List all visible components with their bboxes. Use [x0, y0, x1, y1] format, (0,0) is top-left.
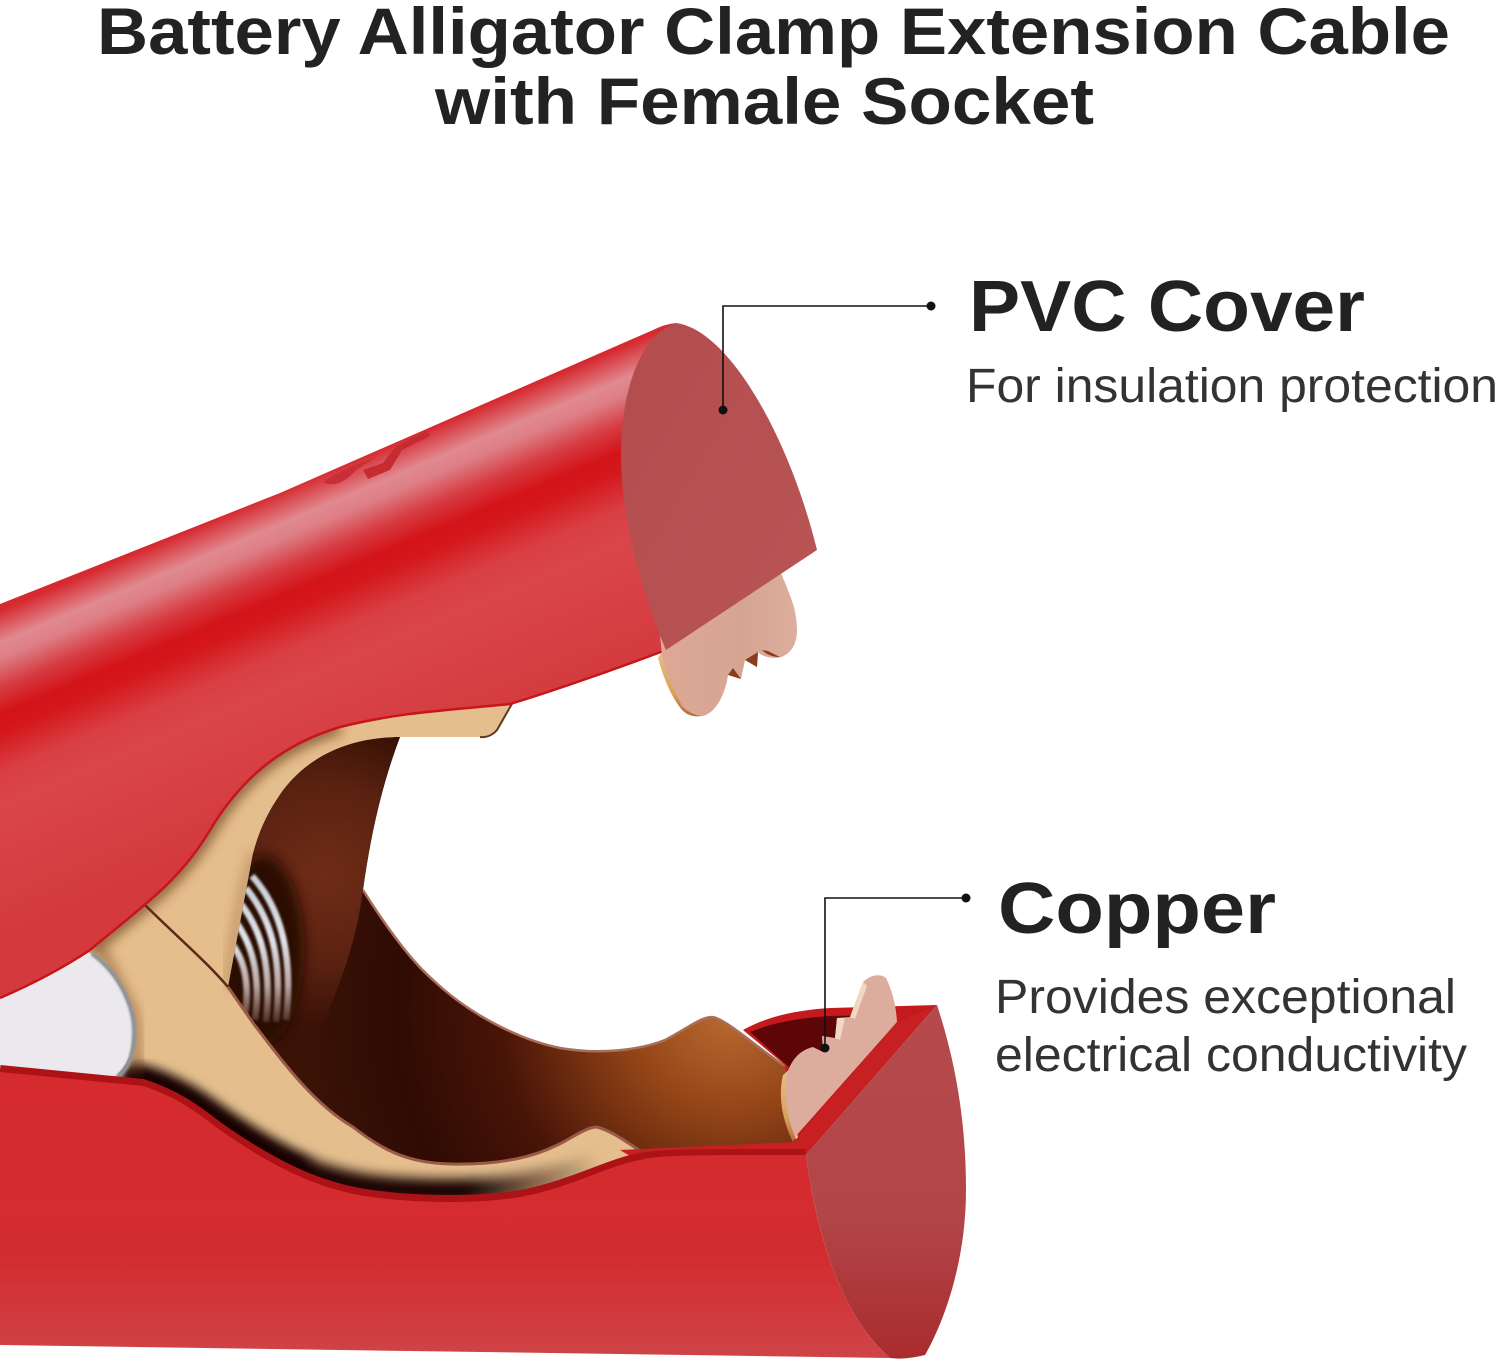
title — [97, 0, 1450, 138]
lower jaw red housing — [0, 1070, 890, 1358]
callout text: copper: Provides exceptional — [995, 971, 1456, 1024]
lower copper tooth — [781, 975, 897, 1142]
lower jaw rim ledge — [620, 1005, 937, 1162]
fold crease — [143, 903, 228, 987]
shading along red housing — [90, 727, 340, 950]
title: with Female Socket — [434, 64, 1094, 138]
callout text: copper — [995, 869, 1467, 1082]
callout leader: PVC cover — [718, 302, 936, 414]
callout text: PVC cover — [966, 267, 1498, 413]
illustration: alligator clamp — [0, 323, 966, 1359]
copper spring arm, tan inner surface — [80, 700, 647, 1210]
lower jaw end face — [806, 1005, 966, 1359]
inner crescent wall — [228, 737, 400, 1063]
upper jaw red housing — [0, 323, 680, 998]
lower back rim — [743, 1005, 937, 1150]
upper jaw end face — [621, 323, 817, 650]
upper copper tooth — [658, 555, 797, 716]
housing lower edge — [0, 650, 666, 998]
spring coil — [232, 876, 288, 1022]
inner edge highlight — [228, 987, 647, 1164]
latch tab — [363, 431, 430, 479]
callout leader: copper — [820, 894, 970, 1052]
callout text: PVC cover: For insulation protection — [966, 360, 1498, 413]
callout text: copper: electrical conductivity — [995, 1029, 1467, 1082]
callout text: PVC cover: PVC Cover — [969, 267, 1365, 347]
callout text: copper: Copper — [998, 869, 1276, 949]
clamp interior — [200, 737, 796, 1175]
white ball in handle — [0, 952, 134, 1078]
